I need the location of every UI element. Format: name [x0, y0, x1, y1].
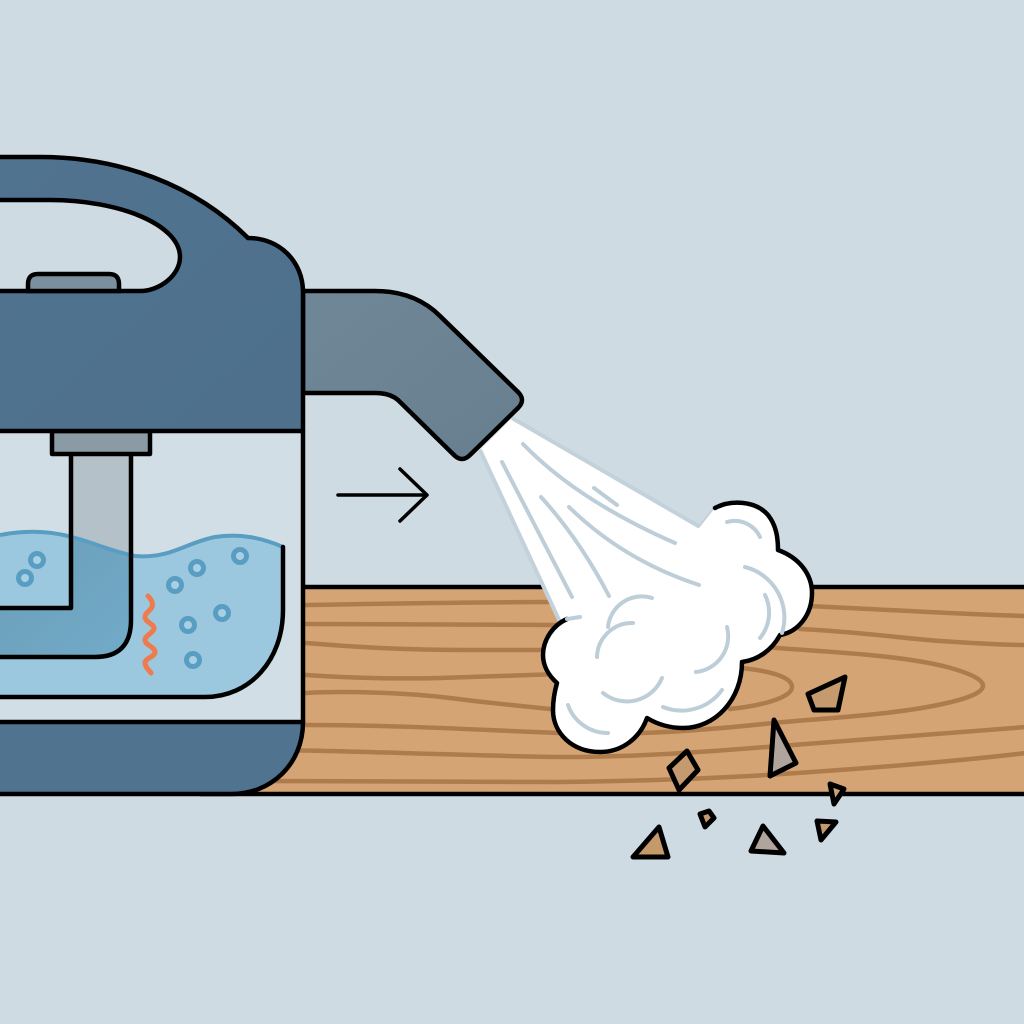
wood grain lines [260, 602, 1024, 782]
inner tank outline [0, 547, 283, 697]
handle button [28, 274, 119, 291]
fragment: lower left triangle [633, 827, 668, 857]
orange heating coil [145, 596, 155, 673]
tube cap [52, 431, 150, 454]
fragment: small on floor line [830, 784, 844, 804]
steam cloud [502, 444, 812, 752]
tank right wall [301, 431, 305, 722]
wood floor plank [200, 587, 1024, 794]
water [0, 532, 283, 697]
steam streaks [502, 444, 699, 597]
fragment: tiny [700, 811, 714, 827]
debris fragments [633, 677, 845, 857]
water tank [0, 431, 303, 722]
water surface [0, 532, 283, 556]
fragment: quad on wood [808, 677, 845, 710]
bubbles [18, 550, 246, 666]
fragment: lower right triangle [817, 821, 836, 840]
cloud contour lines [567, 521, 784, 733]
tube outline [0, 454, 131, 657]
direction arrow [338, 469, 427, 521]
fragment: tall grey shard [770, 720, 796, 776]
steam cone [480, 418, 715, 622]
nozzle [303, 291, 522, 459]
tube upper part [72, 454, 131, 554]
tube submerged part [0, 537, 131, 657]
body base [0, 722, 303, 794]
fragment: diamond [669, 751, 698, 790]
floor border lines [200, 587, 1024, 794]
fragment: lower grey triangle [751, 826, 784, 853]
body top and handle [0, 157, 303, 431]
cleaner body [0, 157, 303, 794]
